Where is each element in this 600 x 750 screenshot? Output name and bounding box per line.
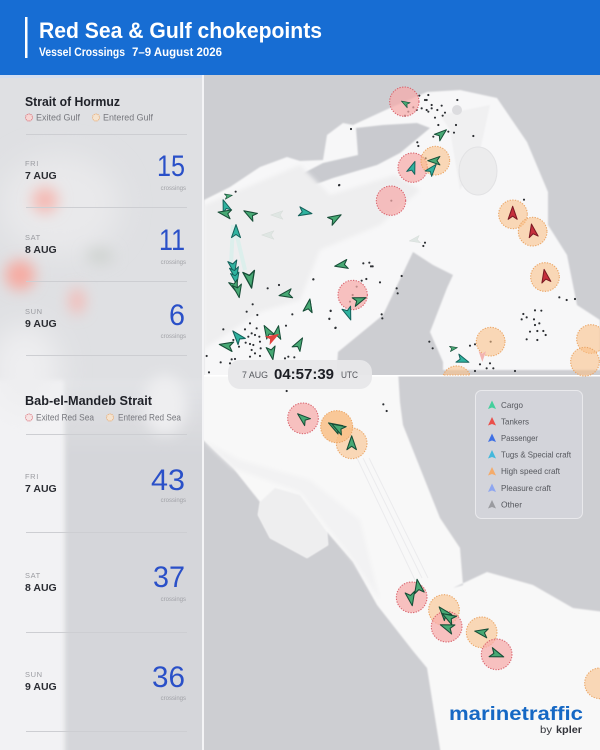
legend item: Pleasure craft: Pleasure craft [501, 483, 552, 493]
row: 9 Aug [25, 661, 186, 702]
row: 7 Aug: 7 AUG [25, 170, 57, 182]
dots: vessels in Hormuz map west [207, 185, 339, 372]
divider between maps [204, 375, 600, 376]
panel: Bab-el-Mandeb Strait [25, 393, 187, 732]
row: 7 Aug: 15 [157, 150, 185, 183]
row: 8 Aug [25, 561, 186, 603]
row: 9 Aug: 9 AUG [25, 318, 57, 330]
row: 9 Aug: SUN [25, 307, 43, 316]
timestamp pill: UTC [341, 370, 358, 380]
row: 8 Aug: 37 [153, 561, 185, 594]
legend: Entered Red Sea [118, 412, 181, 422]
legend: Entered Gulf [103, 112, 153, 122]
logo [449, 704, 583, 736]
map: Bab-el-Mandeb [203, 370, 600, 750]
legend item: Cargo: Cargo [501, 400, 523, 410]
ships: Bab-el-Mandeb [295, 410, 505, 661]
logo: marinetraffic [449, 704, 583, 725]
row: 9 Aug: SUN [25, 670, 43, 679]
ships: Hormuz east [298, 99, 551, 366]
row: 7 Aug [25, 150, 186, 192]
legend: Exited Gulf [36, 112, 80, 122]
legend [26, 412, 181, 422]
row: 9 Aug: crossings [161, 696, 186, 702]
panel: Strait of Hormuz [25, 94, 187, 356]
subtitle: Vessel Crossings [39, 47, 125, 59]
dots: vessels in Bab-el-Mandeb map [287, 391, 387, 411]
row: 7 Aug: FRI [25, 159, 39, 168]
row: 7 Aug [25, 464, 186, 504]
heading: Bab-el-Mandeb Strait [25, 393, 153, 408]
legend: Exited Red Sea [36, 412, 94, 422]
row: 8 Aug: 8 AUG [25, 244, 57, 256]
row: 8 Aug: SAT [25, 571, 41, 580]
row: 8 Aug [25, 224, 186, 266]
row: 9 Aug [25, 299, 186, 340]
row: 9 Aug: 36 [152, 661, 185, 694]
timestamp pill: 04:57:39 [274, 367, 334, 383]
timestamp pill [228, 360, 372, 389]
row: 7 Aug: 43 [151, 464, 185, 497]
subtitle: 7–9 August 2026 [132, 47, 222, 59]
legend [26, 112, 153, 122]
logo: by [540, 725, 552, 736]
row: 8 Aug: 8 AUG [25, 582, 57, 594]
legend: vessel types [476, 390, 582, 518]
row: 8 Aug: crossings [161, 597, 186, 603]
row: 9 Aug: crossings [161, 334, 186, 340]
row: 7 Aug: FRI [25, 472, 39, 481]
crossing circles: Bab-el-Mandeb [288, 403, 600, 699]
header band [0, 0, 600, 75]
map: Strait of Hormuz [204, 75, 600, 380]
legend item: Other: Other [501, 500, 522, 510]
row: 8 Aug: crossings [161, 260, 186, 266]
row: 9 Aug: 9 AUG [25, 681, 57, 693]
title: Red Sea & Gulf chokepoints [39, 18, 322, 43]
legend item: Tugs: Tugs & Special craft [501, 450, 572, 460]
subtitle [39, 47, 222, 59]
timestamp pill: 7 AUG [242, 370, 268, 380]
row: 8 Aug: SAT [25, 233, 41, 242]
legend item: Tankers: Tankers [501, 416, 529, 426]
panel: sidebar background [0, 75, 202, 750]
ships: Hormuz west [217, 193, 314, 360]
row: 7 Aug: 7 AUG [25, 483, 57, 495]
dots: vessels in Hormuz map east [313, 95, 575, 371]
heading: Strait of Hormuz [25, 94, 120, 109]
crossing circles: Hormuz [338, 87, 600, 376]
row: 9 Aug: 6 [169, 299, 185, 332]
legend item: Passenger: Passenger [501, 433, 538, 443]
logo: kpler [556, 724, 582, 736]
row: 7 Aug: crossings [161, 186, 186, 192]
legend item: High speed craft: High speed craft [501, 466, 561, 476]
row: 8 Aug: 11 [159, 224, 185, 257]
row: 7 Aug: crossings [161, 498, 186, 504]
